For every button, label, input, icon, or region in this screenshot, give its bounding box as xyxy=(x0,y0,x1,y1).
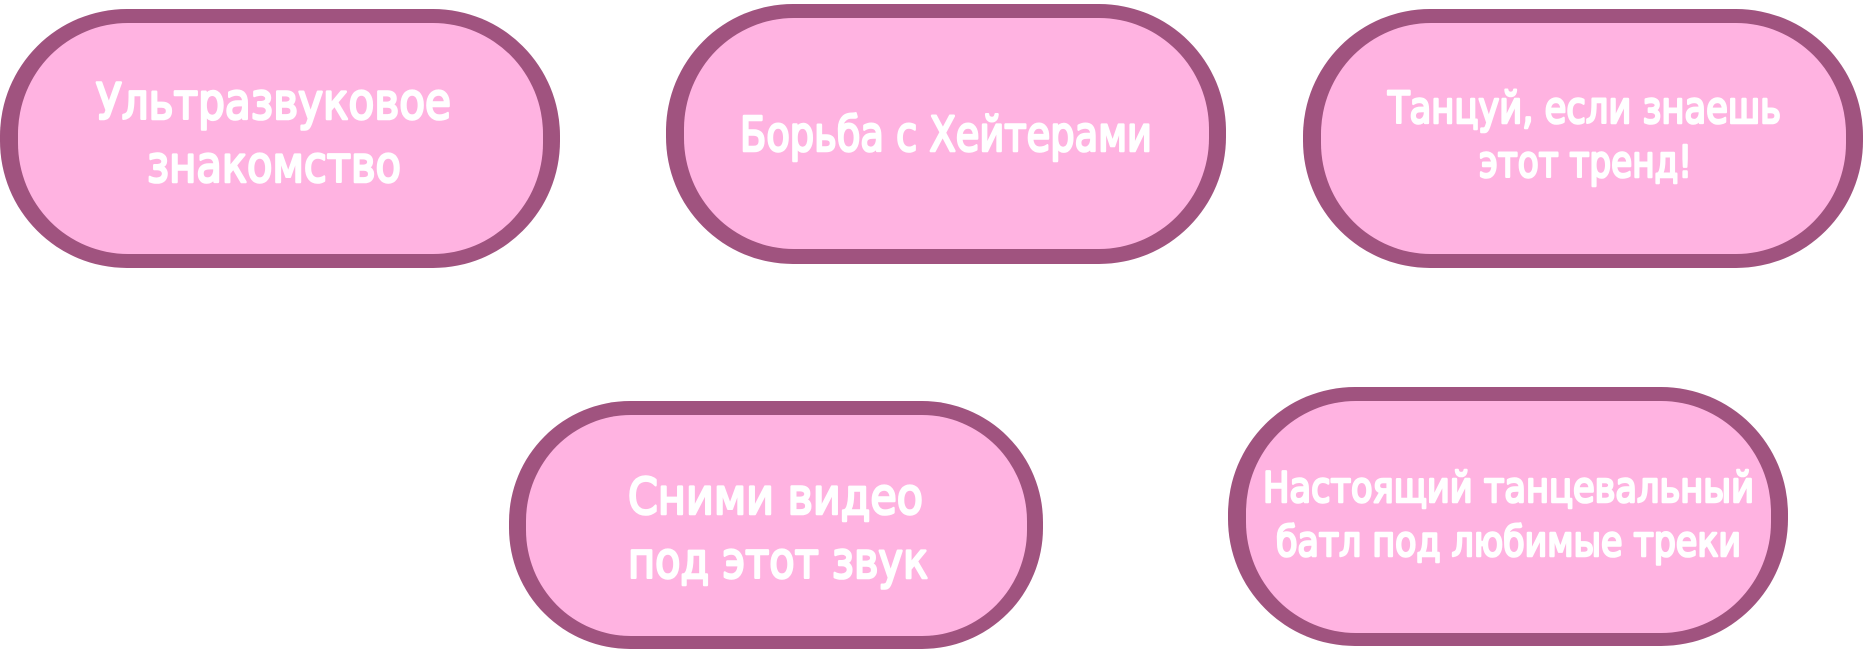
panel: Dance if you know this trend pill xyxy=(1303,9,1863,268)
label: Real dance battle: Настоящий танцевальный xyxy=(1263,463,1754,512)
label: Film a video to this sound: Сними видео xyxy=(628,468,923,526)
panel: Fighting haters pill xyxy=(666,4,1226,264)
label: Real dance battle xyxy=(1263,463,1754,566)
label: Dance if you know this trend: этот тренд! xyxy=(1479,137,1692,188)
panel: Ultrasound dating pill xyxy=(0,9,560,268)
panel: Film a video to this sound pill xyxy=(509,401,1043,649)
label: Dance if you know this trend xyxy=(1387,83,1781,188)
label: Film a video to this sound xyxy=(628,468,928,590)
label: Film a video to this sound: под этот звук xyxy=(628,532,928,590)
label: Ultrasound dating xyxy=(96,73,451,194)
label: Ultrasound dating: Ультразвуковое xyxy=(96,73,451,131)
label: Fighting haters: Борьба с Хейтерами xyxy=(740,107,1152,163)
label: Real dance battle: батл под любимые треки xyxy=(1276,517,1741,566)
panel: Real dance battle pill xyxy=(1228,387,1788,646)
label: Ultrasound dating: знакомство xyxy=(147,136,401,194)
label: Dance if you know this trend: Танцуй, если знаешь xyxy=(1387,83,1781,134)
